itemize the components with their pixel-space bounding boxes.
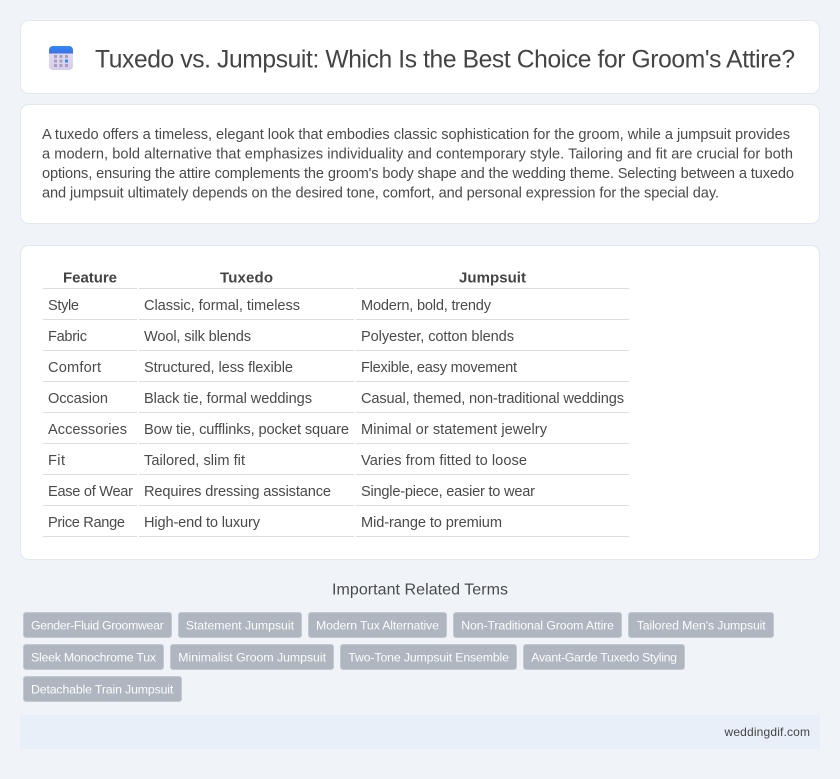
tag: [178, 612, 302, 638]
tag: Sleek Monochrome Tux: [31, 650, 157, 664]
tag: Tailored Men's Jumpsuit: [637, 618, 766, 632]
tag: Two-Tone Jumpsuit Ensemble: [348, 650, 509, 664]
tag: Detachable Train Jumpsuit: [31, 682, 174, 696]
tag: [524, 644, 684, 670]
text block: introduction paragraph: A tuxedo offers a timeless, elegant look that embodies classic sophistication for the groom, while a jumpsuit provides: [42, 127, 790, 143]
tag: [24, 676, 182, 702]
tag: [454, 612, 622, 638]
row: style: [48, 298, 492, 314]
text block: introduction paragraph: a modern, bold alternative that emphasizes individuality and contemporary style. Tailoring and fit are crucial for both: [42, 146, 793, 162]
row: price range: Mid-range to premium: [361, 515, 502, 531]
row: ease of wear: [48, 484, 535, 500]
table header: Feature: [63, 270, 117, 287]
heading: important related terms: Important Related Terms: [332, 582, 508, 598]
tag: Statement Jumpsuit: [186, 618, 295, 632]
tag: Modern Tux Alternative: [316, 618, 439, 632]
row: price range: [48, 515, 502, 531]
row: fabric: Fabric: [48, 329, 87, 345]
tag: Minimalist Groom Jumpsuit: [178, 650, 327, 664]
table rules: [43, 288, 629, 536]
row: fit: [48, 453, 527, 469]
table header: Jumpsuit: [459, 270, 526, 287]
row: occasion: Occasion: [48, 391, 108, 407]
row: comfort: Structured, less flexible: [144, 360, 293, 376]
panel: title header: [20, 20, 820, 94]
row: accessories: Accessories: [48, 422, 127, 438]
row: comfort: Comfort: [48, 360, 101, 376]
footer: [20, 715, 820, 749]
row: fit: Fit: [48, 453, 65, 469]
row: fabric: [48, 329, 514, 345]
row: ease of wear: Ease of Wear: [48, 484, 133, 500]
row: fit: Tailored, slim fit: [144, 453, 245, 469]
row: price range: Price Range: [48, 515, 125, 531]
row: fabric: Polyester, cotton blends: [361, 329, 514, 345]
tag: Gender-Fluid Groomwear: [31, 618, 164, 632]
row: fabric: Wool, silk blends: [144, 329, 251, 345]
tag: [24, 612, 172, 638]
panel: introduction: [20, 104, 820, 224]
row: fit: Varies from fitted to loose: [361, 453, 527, 469]
tag: [24, 644, 164, 670]
table header: [63, 270, 526, 287]
row: price range: High-end to luxury: [144, 515, 261, 531]
table header: Tuxedo: [220, 270, 273, 287]
row: ease of wear: Requires dressing assistance: [144, 484, 331, 500]
row: occasion: Casual, themed, non-traditional weddings: [361, 391, 624, 407]
tag: Non-Traditional Groom Attire: [461, 618, 614, 632]
row: style: Classic, formal, timeless: [144, 298, 300, 314]
tag: [340, 644, 516, 670]
row: comfort: Flexible, easy movement: [361, 360, 517, 376]
row: accessories: [48, 422, 548, 438]
text block: introduction paragraph: and jumpsuit ultimately depends on the desired tone, comfort, and personal expression for the special day.: [42, 186, 719, 202]
row: style: Style: [48, 298, 79, 314]
text block: introduction paragraph: options, ensuring the attire complements the groom's body shape and the wedding theme. Selecting between a tuxedo: [42, 166, 794, 182]
row: comfort: [48, 360, 517, 376]
panel: comparison table: [20, 246, 820, 560]
row: style: Modern, bold, trendy: [361, 298, 492, 314]
tag: [170, 644, 334, 670]
icon: calendar: [49, 46, 73, 70]
row: accessories: Minimal or statement jewelry: [361, 422, 548, 438]
tag: [308, 612, 446, 638]
row: ease of wear: Single-piece, easier to wear: [361, 484, 535, 500]
related term tags: [24, 612, 774, 702]
tag: Avant-Garde Tuxedo Styling: [531, 650, 677, 664]
tag: [628, 612, 774, 638]
footer source link: weddingdif.com: [724, 725, 810, 739]
text block: introduction paragraph: [42, 127, 794, 202]
row: accessories: Bow tie, cufflinks, pocket square: [144, 422, 349, 438]
title: Tuxedo vs. Jumpsuit: Which Is the Best Choice for Groom's Attire?: [95, 47, 795, 74]
row: occasion: [48, 391, 624, 407]
row: occasion: Black tie, formal weddings: [144, 391, 312, 407]
